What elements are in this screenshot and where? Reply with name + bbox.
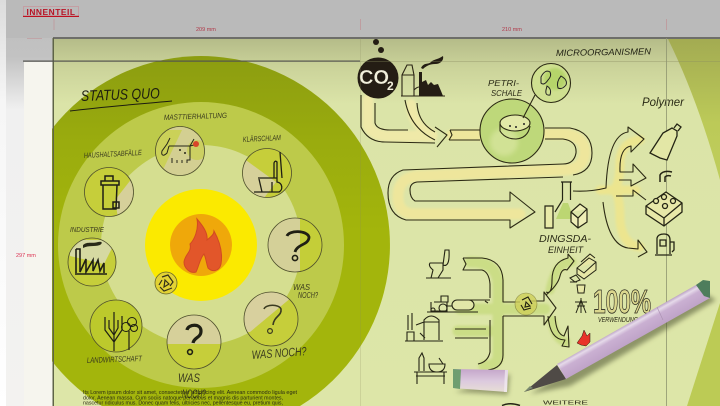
concentric circle diagram — [52, 56, 390, 406]
icon: question mark (Was) — [165, 315, 222, 369]
ink flow lines — [361, 95, 647, 257]
icon: factory (Industrie) — [68, 238, 116, 286]
icon: biogas tank — [405, 313, 443, 341]
body text: dolor. Aenean massa. Cum sociis natoque penatibus et magnis dis parturient montes, — [83, 396, 283, 402]
icon: flask and box (Dingsda unit) — [545, 182, 587, 228]
crop marks — [27, 19, 666, 38]
icon: bottle — [650, 124, 681, 160]
circle labels: WAS — [178, 371, 200, 385]
pipe ink lines — [455, 254, 574, 370]
flow washes — [368, 100, 640, 366]
icon: sludge (Klärschlamm) — [242, 148, 292, 198]
icon: CO2 cloud: 2 — [387, 79, 394, 93]
label: Mikroorganismen: MICROORGANISMEN — [556, 46, 652, 58]
circle labels: NOCH? — [298, 291, 318, 300]
body text — [83, 390, 297, 406]
icon: question mark (Was noch, lower) — [244, 292, 298, 346]
icon: building block — [646, 192, 682, 226]
small output icons — [570, 254, 596, 313]
label: 100 %: VERWENDUNG — [598, 317, 638, 324]
circle labels: HAUSHALTSABFÄLLE — [84, 148, 143, 160]
label: Petri-Schale: SCHALE — [491, 88, 522, 98]
circle labels: LANDWIRTSCHAFT — [87, 354, 143, 365]
icon: table with food — [414, 353, 447, 384]
badge: Innenteil: INNENTEIL — [26, 8, 76, 17]
circle labels: WAS — [293, 283, 311, 292]
label: Petri-Schale — [488, 78, 522, 98]
dimension: 297 mm: 297 mm — [16, 253, 36, 259]
label: Polymer: Polymer — [642, 97, 685, 109]
label: Dingsda-Einheit: EINHEIT — [548, 245, 584, 255]
label: 100 %: 100% — [593, 283, 651, 320]
icon: petri dish — [480, 99, 544, 163]
heading: Status Quo: STATUS QUO — [81, 85, 160, 105]
top grey band — [6, 0, 720, 38]
circle labels: MASTTIERHALTUNG — [164, 111, 227, 122]
circle labels: INDUSTRIE — [70, 227, 104, 234]
circle labels: KLÄRSCHLAM — [243, 133, 282, 144]
bottom cut-off sketches — [502, 401, 589, 406]
circle labels: NOCH? — [182, 387, 206, 401]
label: Petri-Schale: PETRI- — [488, 78, 519, 88]
icon: question mark (Was noch, right) — [268, 218, 322, 272]
icon: microorganism magnifier — [523, 64, 570, 118]
icon: CO2 cloud: CO — [359, 67, 389, 89]
icon: recycling — [155, 272, 177, 294]
icon: flame — [184, 219, 222, 272]
label: Dingsda-Einheit: DINGSDA- — [539, 234, 592, 245]
circle labels: WAS NOCH? — [251, 344, 307, 362]
icon: small recycling circle on pipe — [515, 293, 537, 315]
dimension: 210 mm: 210 mm — [502, 27, 522, 33]
icon: CO2 cloud — [358, 39, 398, 98]
icon: cow (Masttierhaltung) — [155, 126, 207, 176]
pen — [524, 280, 716, 394]
icon: fuel pump — [655, 234, 674, 255]
icon: crops (Landwirtschaft) — [90, 300, 142, 352]
body text: Its Lorem ipsum dolor sit amet, consectetuer adipiscing elit. Aenean commodo ligula eget — [83, 390, 297, 396]
icon: tractor and tank — [427, 296, 478, 312]
icon: pipe — [660, 171, 672, 182]
pen cap — [453, 369, 510, 395]
dimension: 209 mm: 209 mm — [196, 27, 216, 33]
label: 100 % — [593, 283, 651, 324]
icon: red flame — [577, 330, 590, 346]
circle labels — [70, 111, 318, 401]
icon: toilet — [426, 250, 451, 278]
right green shapes — [668, 39, 720, 406]
label: Dingsda-Einheit — [539, 234, 592, 255]
heading: Status Quo — [70, 85, 172, 111]
icon: refinery and factory — [401, 56, 445, 96]
icon: bin (Haushaltsabfälle) — [84, 168, 134, 218]
